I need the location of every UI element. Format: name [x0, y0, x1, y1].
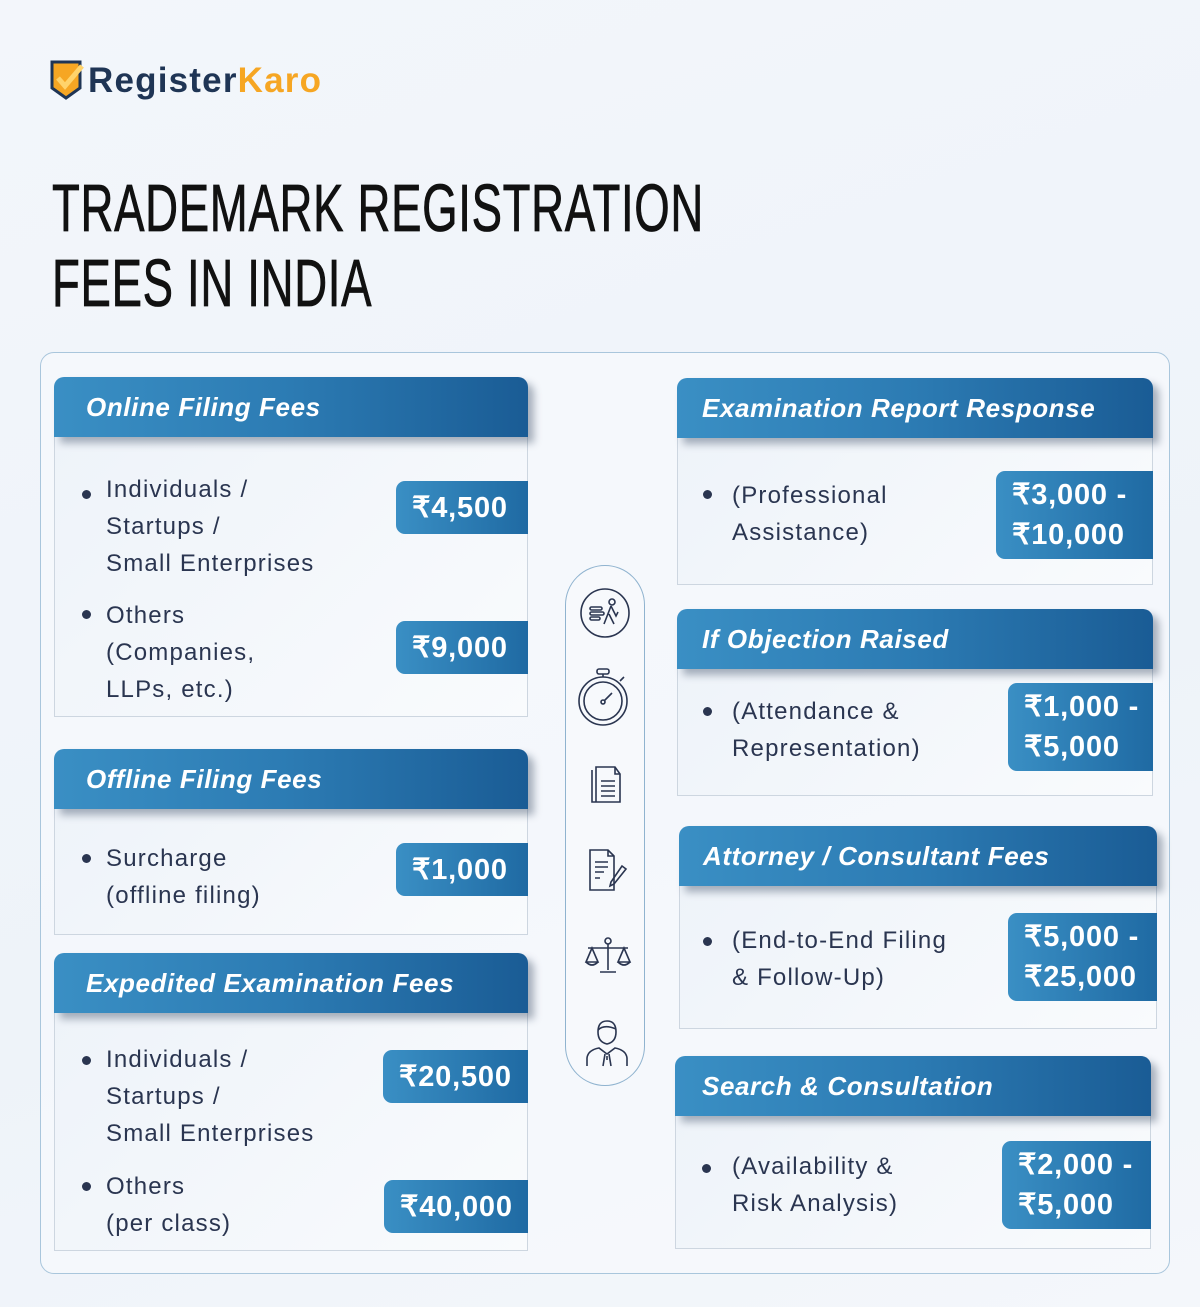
text: (Availability &: [732, 1153, 894, 1180]
text: others: Others: [106, 1173, 185, 1200]
icon: shield check: [50, 60, 84, 100]
icon: stopwatch: [578, 668, 628, 726]
badge: 20500: [383, 1050, 528, 1103]
text: individuals: Individuals /: [106, 476, 248, 503]
text: [732, 482, 888, 546]
badge: [1008, 913, 1157, 1001]
badge: [1002, 1141, 1151, 1229]
heading: Examination Report Response: [702, 393, 1095, 423]
badge: 9000: ₹9,000: [412, 632, 508, 664]
badge: 40000: ₹40,000: [400, 1190, 513, 1222]
badge: ₹10,000: [1012, 519, 1125, 551]
text: individuals: Startups /: [106, 513, 221, 540]
text: others: (per class): [106, 1210, 231, 1237]
logo: [50, 60, 322, 100]
text: (Attendance &: [732, 698, 900, 725]
logo text: RegisterKaro: [88, 61, 322, 100]
text: (End-to-End Filing: [732, 927, 947, 954]
badge: ₹25,000: [1024, 961, 1137, 993]
text: others: LLPs, etc.): [106, 676, 234, 703]
icon: runner: [580, 588, 630, 638]
badge: [996, 471, 1153, 559]
badge: 4500: ₹4,500: [412, 492, 508, 524]
text: surcharge: (offline filing): [106, 882, 261, 909]
text: Risk Analysis): [732, 1190, 898, 1217]
heading: [677, 378, 1153, 438]
icon: document with pen: [589, 849, 628, 891]
badge: 40000: [384, 1180, 528, 1233]
text: individuals: [106, 1046, 314, 1147]
text: [732, 927, 947, 991]
heading: [679, 826, 1157, 886]
heading: Search & Consultation: [702, 1071, 993, 1101]
badge: ₹5,000: [1018, 1189, 1114, 1221]
panel: search & consultation: [675, 1056, 1162, 1249]
badge: ₹3,000 -: [1012, 479, 1127, 511]
badge: ₹5,000: [1024, 731, 1120, 763]
heading: If Objection Raised: [702, 624, 949, 654]
heading: Expedited Examination Fees: [86, 968, 454, 998]
heading: [54, 377, 528, 437]
badge: ₹2,000 -: [1018, 1149, 1133, 1181]
icon: person: [586, 1020, 628, 1066]
heading: [54, 953, 528, 1013]
text: others: (Companies,: [106, 639, 255, 666]
badge: [1008, 683, 1153, 771]
icon: scales: [584, 937, 632, 973]
text: Assistance): [732, 519, 869, 546]
text: others: Others: [106, 602, 185, 629]
text: [732, 698, 921, 762]
badge: 20500: ₹20,500: [399, 1060, 512, 1092]
panel: attorney / consultant fees: [679, 826, 1168, 1029]
panel: examination report response: [677, 378, 1164, 585]
panel: if objection raised: [677, 609, 1164, 796]
panel: icon column: [565, 565, 645, 1086]
badge: 4500: [396, 481, 528, 534]
heading: [54, 749, 528, 809]
text: others: [106, 602, 255, 703]
heading: [677, 609, 1153, 669]
badge: ₹5,000 -: [1024, 921, 1139, 953]
text: surcharge: Surcharge: [106, 845, 228, 872]
text: individuals: Individuals /: [106, 1046, 248, 1073]
panel: expedited examination fees: [54, 953, 539, 1251]
title: TRADEMARK REGISTRATION: [52, 171, 704, 246]
badge: 1000: [396, 843, 528, 896]
heading: Attorney / Consultant Fees: [703, 841, 1049, 871]
text: & Follow-Up): [732, 964, 885, 991]
badge: 1000: ₹1,000: [412, 854, 508, 886]
text: individuals: Startups /: [106, 1083, 221, 1110]
panel: offline filing fees: [54, 749, 539, 935]
text: [732, 1153, 898, 1217]
text: individuals: [106, 476, 314, 577]
title: FEES IN INDIA: [52, 246, 372, 321]
text: individuals: Small Enterprises: [106, 550, 314, 577]
title: [52, 171, 704, 321]
frame: [40, 352, 1170, 1274]
badge: ₹1,000 -: [1024, 691, 1139, 723]
text: individuals: Small Enterprises: [106, 1120, 314, 1147]
heading: Offline Filing Fees: [86, 764, 322, 794]
heading: [675, 1056, 1151, 1116]
icon: document: [591, 766, 621, 803]
text: (Professional: [732, 482, 888, 509]
text: Representation): [732, 735, 921, 762]
badge: 9000: [396, 621, 528, 674]
text: surcharge: [106, 845, 261, 909]
text: others: [106, 1173, 231, 1237]
heading: Online Filing Fees: [86, 392, 321, 422]
panel: online filing fees: [54, 377, 539, 717]
